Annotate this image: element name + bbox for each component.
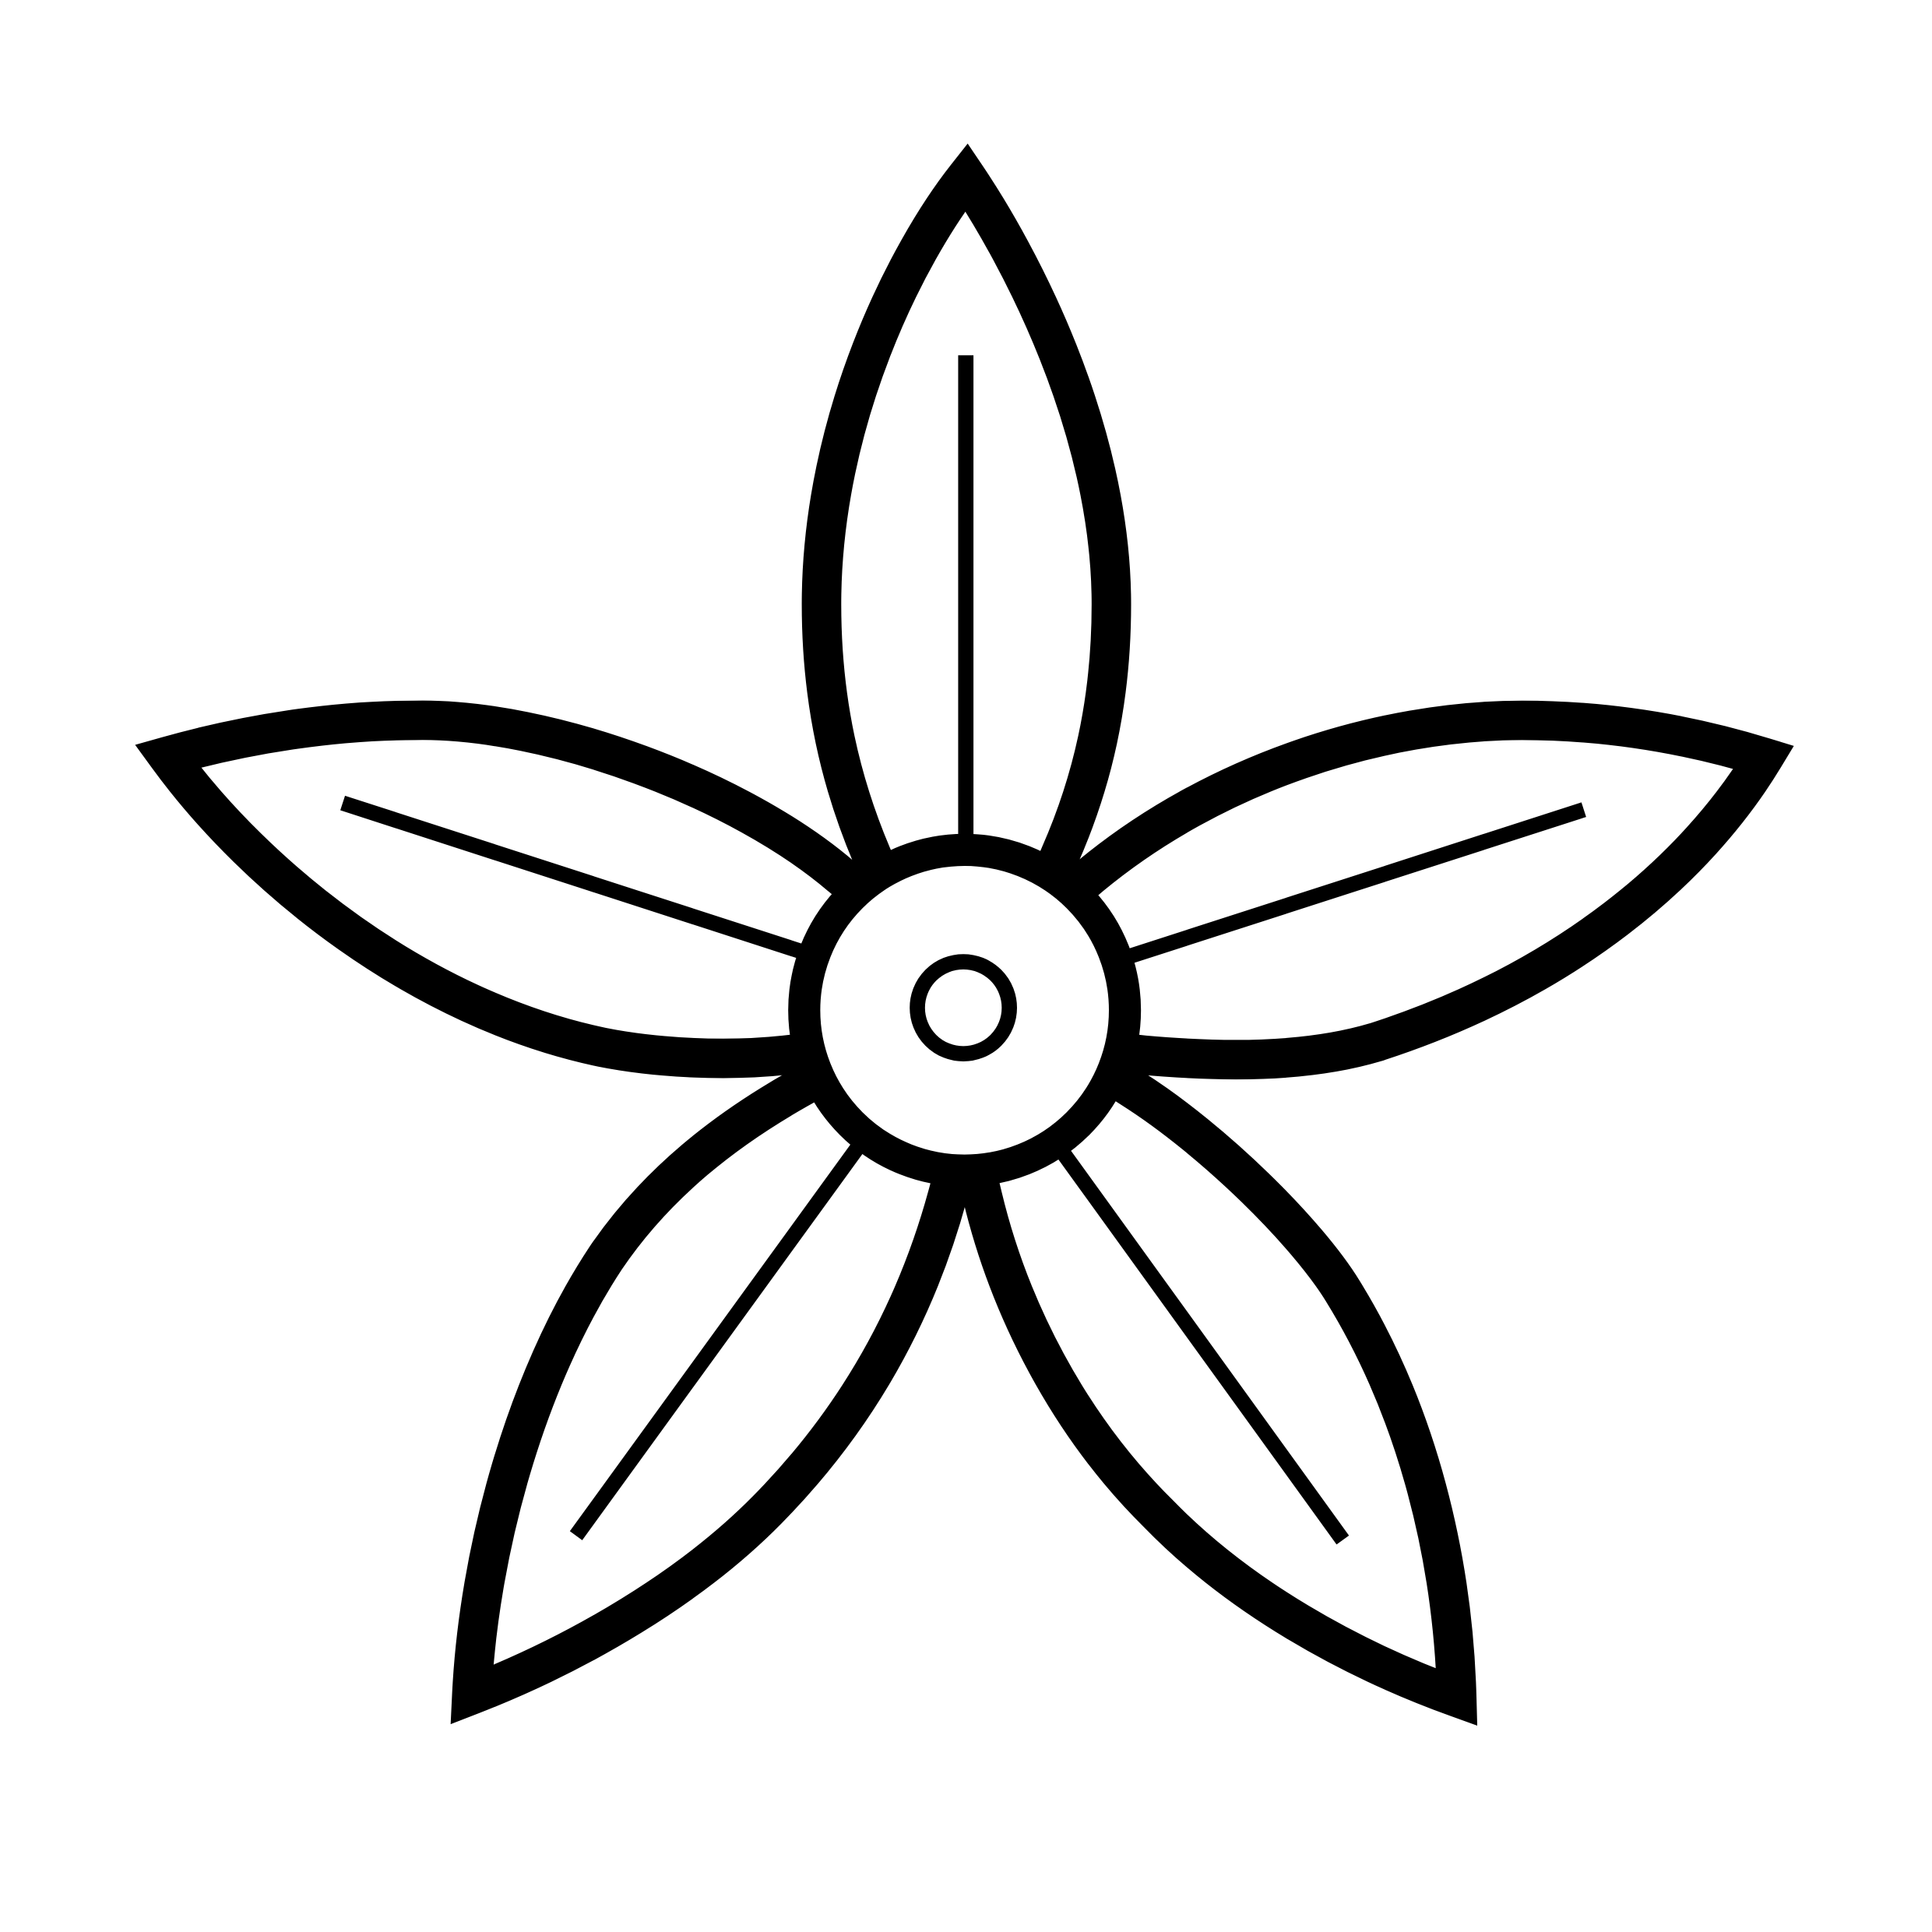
petal: upper left bbox=[167, 720, 888, 1058]
petal: lower left bbox=[472, 1052, 971, 1694]
vein: lower right petal bbox=[1051, 1136, 1343, 1540]
vein: lower left petal bbox=[576, 1131, 870, 1536]
vein: upper right petal bbox=[1104, 810, 1584, 965]
petal: upper right bbox=[1046, 720, 1764, 1060]
flower centre ring bbox=[804, 850, 1125, 1170]
vein: upper left petal bbox=[343, 803, 826, 959]
inner small circle bbox=[917, 962, 1009, 1054]
petal: top bbox=[822, 177, 1111, 952]
petal: lower right bbox=[960, 1042, 1457, 1698]
vein: top petal bbox=[961, 355, 970, 864]
